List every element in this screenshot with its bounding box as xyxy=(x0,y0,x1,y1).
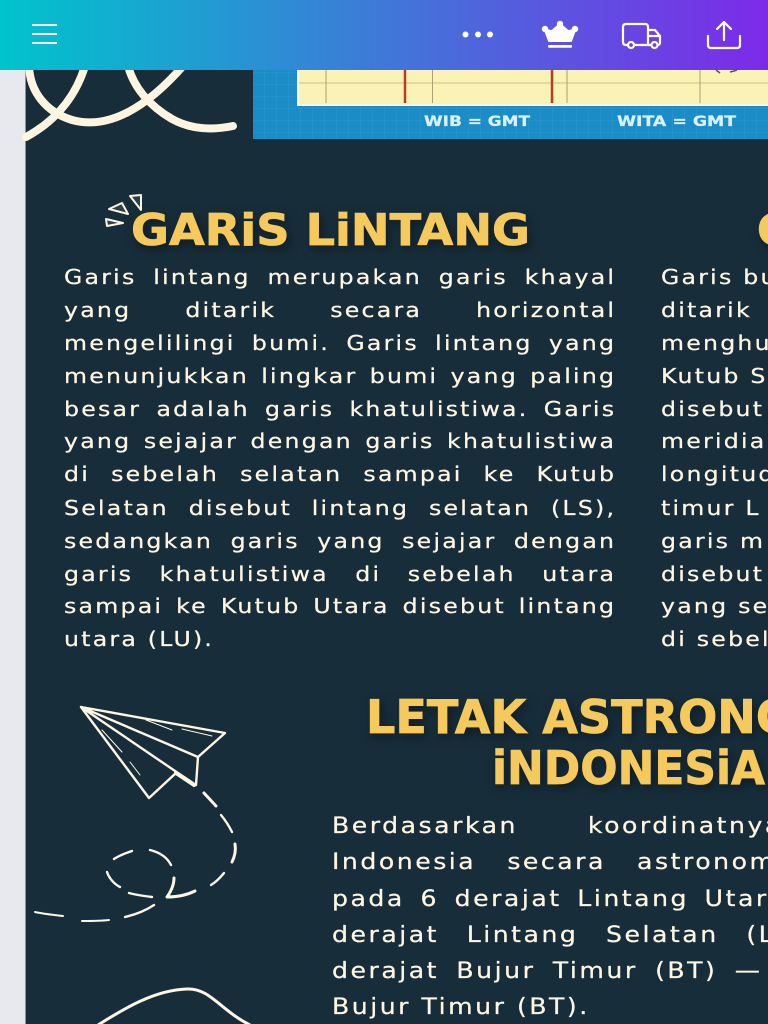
text block: Garis Lintang paragraph: utara (LU). xyxy=(64,627,214,651)
label: WIB: WIB = GMT xyxy=(424,114,531,130)
text block: Garis Bujur paragraph (cropped): yang se xyxy=(661,594,768,618)
icon: more dots xyxy=(462,32,493,38)
icon: share upload xyxy=(706,20,742,50)
text block: Garis Lintang paragraph: mengelilingi bumi. Garis lintang yang xyxy=(64,331,616,355)
text block: Garis Lintang paragraph: sampai ke Kutub Utara disebut lintang xyxy=(64,594,616,618)
text block: Garis Bujur paragraph (cropped): garis m xyxy=(661,529,765,553)
text block: Garis Lintang paragraph: menunjukkan lingkar bumi yang paling xyxy=(64,364,616,388)
heading: Garis Lintang: GARiS LiNTANG xyxy=(131,205,530,256)
text block: Garis Bujur paragraph (cropped): Kutub S xyxy=(661,364,768,388)
illustration: paper plane with dashed trail xyxy=(34,706,237,922)
label: WITA: WITA = GMT xyxy=(617,114,737,130)
app top bar xyxy=(0,0,768,70)
text block: Garis Bujur paragraph (cropped): disebut xyxy=(661,562,764,586)
heading: Letak Astronomis Indonesia xyxy=(366,690,768,795)
text block: Garis Lintang paragraph: yang ditarik secara horizontal xyxy=(64,298,616,322)
map strip: time-zone map fragment xyxy=(253,70,768,139)
text block: Garis Lintang paragraph xyxy=(64,265,616,651)
text block: Garis Lintang paragraph: Selatan disebut lintang selatan (LS), xyxy=(64,496,616,520)
icon: crown xyxy=(542,20,578,48)
text block: Letak Astronomis paragraph (cropped): Bujur Timur (BT). xyxy=(332,995,590,1020)
decoration: cream hill outline xyxy=(97,988,251,1024)
text block: Garis Bujur paragraph (cropped): disebut xyxy=(661,397,764,421)
text block: Garis Lintang paragraph: besar adalah garis khatulistiwa. Garis xyxy=(64,397,616,421)
icon: delivery truck xyxy=(622,22,662,50)
text block: Garis Lintang paragraph: garis khatulistiwa di sebelah utara xyxy=(64,562,616,586)
text block: Garis Bujur paragraph (cropped): ditarik xyxy=(661,298,752,322)
text block: Letak Astronomis paragraph (cropped) xyxy=(332,814,768,1020)
text block: Garis Lintang paragraph: sedangkan garis yang sejajar dengan xyxy=(64,529,616,553)
heading: Garis Lintang xyxy=(105,194,768,256)
text block: Garis Lintang paragraph: di sebelah selatan sampai ke Kutub xyxy=(64,462,616,486)
text block: Garis Lintang paragraph: yang sejajar dengan garis khatulistiwa xyxy=(64,429,616,453)
text block: Garis Lintang paragraph: Garis lintang merupakan garis khayal xyxy=(64,265,616,289)
text block: Garis Bujur paragraph (cropped) xyxy=(661,265,768,651)
icon: sparkle triangles xyxy=(106,195,141,226)
text block: Garis Bujur paragraph (cropped): di sebel xyxy=(661,627,768,651)
decoration: cream looping curves xyxy=(22,70,237,141)
text block: Garis Bujur paragraph (cropped): timur L xyxy=(661,496,761,520)
text block: Garis Bujur paragraph (cropped): meridia xyxy=(661,429,766,453)
icon: menu xyxy=(32,24,57,44)
